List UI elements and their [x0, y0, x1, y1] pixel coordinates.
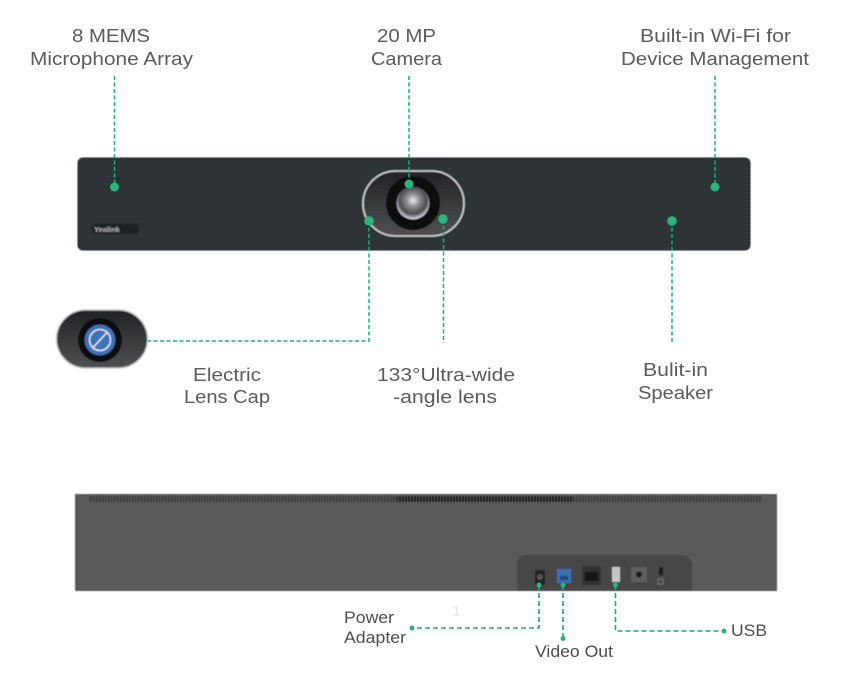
label: Bulit-in Speaker: Bulit-in: [643, 360, 708, 380]
device: rear view of video bar: [75, 494, 777, 591]
Yealink logo: [92, 224, 139, 234]
label: Built-in Wi-Fi for Device Management: Device Management: [621, 49, 809, 69]
label: 8 MEMS Microphone Array: [30, 26, 193, 192]
label: 20 MP Camera: 20 MP: [377, 26, 436, 46]
label: Bulit-in Speaker: Speaker: [638, 383, 713, 403]
port panel: [517, 555, 692, 591]
label: Video Out: Video Out: [535, 643, 613, 661]
label: Power Adapter: Adapter: [344, 629, 407, 647]
vent slots: [90, 496, 762, 502]
fabric bar body: [78, 158, 750, 250]
label: Power Adapter: Power: [344, 609, 395, 627]
device: front view of video bar: [78, 158, 750, 250]
faint stray mark: 1: [452, 603, 460, 620]
camera housing: [363, 171, 464, 236]
label: Built-in Wi-Fi for Device Management: [621, 26, 809, 192]
label: Video Out: [535, 582, 613, 661]
label: 20 MP Camera: Camera: [371, 49, 443, 69]
label: 20 MP Camera: [371, 26, 443, 188]
Yealink logo: Yealink: [94, 225, 121, 234]
label: USB: [613, 582, 767, 640]
label: 133° ultra-wide-angle lens: -angle lens: [393, 387, 497, 407]
label: Built-in Wi-Fi for Device Management: Built-in Wi-Fi for: [640, 26, 791, 46]
label: 8 MEMS Microphone Array: Microphone Array: [30, 49, 193, 69]
label: 133° ultra-wide-angle lens: 133°Ultra-wide: [377, 365, 515, 385]
label: Electric Lens Cap: [148, 216, 374, 407]
icon: electric lens cap closed: [56, 310, 148, 368]
label: USB: USB: [731, 622, 767, 640]
label: Electric Lens Cap: Electric: [193, 365, 261, 385]
label: Power Adapter: [344, 582, 542, 647]
label: Bulit-in Speaker: [638, 216, 713, 403]
label: 133° ultra-wide-angle lens: [377, 214, 515, 407]
label: 8 MEMS Microphone Array: 8 MEMS: [72, 26, 150, 46]
label: Electric Lens Cap: Lens Cap: [184, 387, 270, 407]
rear body: [75, 494, 777, 591]
